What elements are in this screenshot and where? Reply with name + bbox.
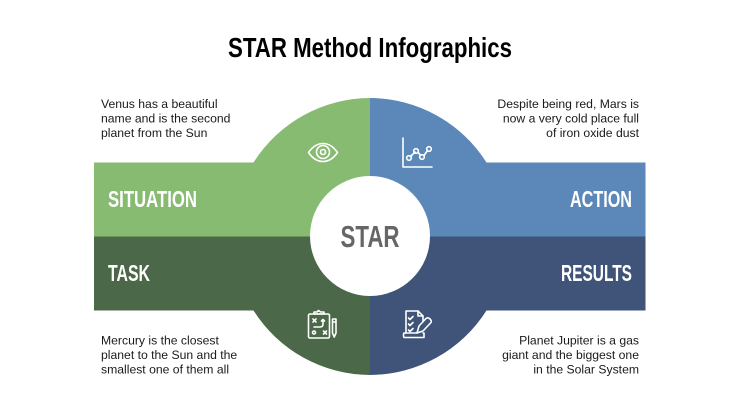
heading: action: ACTION bbox=[570, 186, 632, 212]
panel: situation bbox=[94, 98, 370, 236]
icon: checklist and pen bbox=[404, 311, 431, 338]
center circle bbox=[310, 176, 430, 296]
panel: action bbox=[370, 98, 646, 236]
text block: situation: Venus has a beautiful bbox=[101, 97, 218, 111]
text block: results: in the Solar System bbox=[533, 362, 639, 376]
center label: STAR bbox=[340, 219, 400, 254]
heading: task: TASK bbox=[108, 260, 150, 286]
text block: results: giant and the biggest one bbox=[502, 348, 639, 362]
panel: task bbox=[94, 236, 370, 375]
icon: strategy clipboard bbox=[308, 310, 336, 338]
text block: task: planet to the Sun and the bbox=[101, 348, 237, 362]
text block: situation: planet from the Sun bbox=[101, 126, 207, 140]
text block: situation bbox=[101, 97, 230, 140]
icon: line chart bbox=[403, 138, 432, 167]
heading: situation: SITUATION bbox=[108, 186, 197, 212]
heading: results: RESULTS bbox=[561, 260, 632, 286]
text block: results bbox=[502, 334, 639, 376]
text block: action: of iron oxide dust bbox=[546, 126, 640, 140]
text block: results: Planet Jupiter is a gas bbox=[519, 334, 639, 348]
text block: action: now a very cold place full bbox=[503, 112, 639, 126]
icon: eye bbox=[308, 144, 338, 162]
text block: action: Despite being red, Mars is bbox=[497, 97, 639, 111]
text block: action bbox=[497, 97, 640, 140]
panel: results bbox=[370, 236, 646, 375]
title: STAR Method Infographics bbox=[228, 32, 512, 63]
text block: situation: name and is the second bbox=[101, 112, 230, 126]
text block: task bbox=[101, 334, 237, 376]
text block: task: smallest one of them all bbox=[101, 362, 229, 376]
text block: task: Mercury is the closest bbox=[101, 334, 219, 348]
